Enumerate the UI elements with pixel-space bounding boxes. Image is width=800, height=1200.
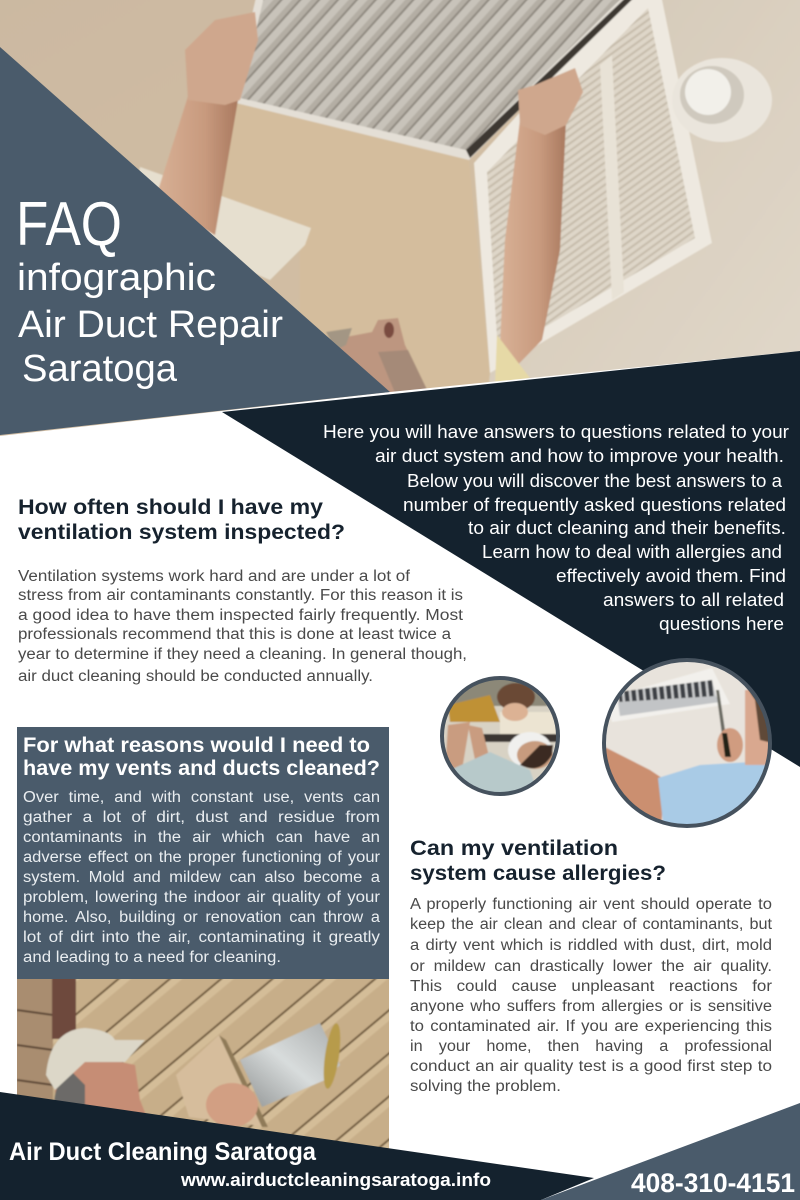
text block: allergies answer: This could cause unpleasant reactions for [410,978,772,995]
text block: inspection answer: year to determine if they need a cleaning. In general though, [18,646,467,663]
intro text block: to air duct cleaning and their benefits. [468,518,786,538]
text block: allergies answer: A properly functioning air vent should operate to [410,896,772,913]
footer band: company [0,1092,594,1200]
text block: allergies answer: keep the air clean and clear of contaminants, but [410,916,773,933]
text block: reasons answer: problem, lowering the indoor air quality of your [23,889,380,906]
icon photo: technician servicing ceiling vent [602,658,772,828]
heading: inspection question [18,496,345,544]
heading: inspection question: How often should I have my [18,496,323,519]
intro banner background [222,351,800,767]
text block: inspection answer [18,568,467,685]
hero photo: technician replacing ceiling air filter [0,0,800,460]
text block: reasons answer: gather a lot of dirt, dust and residue from [23,809,380,826]
text block: reasons answer: adverse effect on the proper functioning of your [23,849,380,866]
text block: reasons answer: lot of dirt into the air, contaminating it greatly [23,929,380,946]
company name: Air Duct Cleaning Saratoga [9,1138,317,1166]
photo: man inspecting exterior wall vent [17,979,389,1148]
panel: reasons for cleaning [17,727,389,979]
text block: reasons answer [23,789,380,966]
intro text block: number of frequently asked questions related [403,495,786,515]
text block: reasons answer: home. Also, building or renovation can throw a [23,909,380,926]
intro text block: Here you will have answers to questions related to your [323,422,789,442]
text block: allergies answer: conduct an air quality test is a good first step to [410,1058,772,1075]
text block: reasons answer: and leading to a need for cleaning. [23,949,281,966]
phone number: 408-310-4151 [631,1168,795,1198]
text block: reasons answer: Over time, and with constant use, vents can [23,789,380,806]
title: Saratoga: Saratoga [22,348,178,390]
heading: inspection question: ventilation system inspected? [18,521,345,544]
text block: inspection answer: air duct cleaning should be conducted annually. [18,668,373,685]
website: www.airductcleaningsaratoga.info [180,1170,491,1190]
text block: inspection answer: Ventilation systems work hard and are under a lot of [18,568,411,585]
text block: inspection answer: professionals recommend that this is done at least twice a [18,626,451,643]
heading: reasons question: have my vents and ducts cleaned? [23,757,380,780]
title panel [0,47,390,435]
intro text block: Below you will discover the best answers to a [407,471,783,491]
intro text block: Learn how to deal with allergies and [482,542,782,562]
text block: reasons answer: system. Mold and mildew can also become a [23,869,380,886]
intro text block: air duct system and how to improve your health. [375,446,784,466]
title: Air Duct Repair: Air Duct Repair [18,304,283,346]
text block: reasons answer: contaminants in the air which can have an [23,829,380,846]
text block: inspection answer: a good idea to have them inspected fairly frequently. Most [18,607,464,624]
text block: allergies answer: solving the problem. [410,1078,561,1095]
text block: allergies answer: anyone who suffers from allergies or is sensitive [410,998,772,1015]
title: infographic: infographic [17,257,216,299]
heading: allergies question [410,837,666,885]
title: FAQ: FAQ [16,190,122,259]
text block: allergies answer: a dirty vent which is riddled with dust, dirt, mold [410,937,772,954]
heading: reasons question: For what reasons would I need to [23,734,370,757]
heading: reasons question [23,734,380,780]
text block: allergies answer [410,896,773,1095]
intro text block: effectively avoid them. Find [556,566,786,586]
heading: allergies question: Can my ventilation [410,837,618,860]
intro text block: questions here [659,614,784,634]
text block: allergies answer: to contaminated air. If you are experiencing this [410,1018,772,1035]
footer band: phone [541,1103,800,1200]
text block: allergies answer: or mildew can drastically lower the air quality. [410,958,772,975]
intro text block [323,422,789,634]
text block: inspection answer: stress from air contaminants constantly. For this reason it is [18,587,463,604]
heading: allergies question: system cause allergies? [410,862,666,885]
icon photo: father lifting child [440,676,560,796]
text block: allergies answer: in your home, then having a professional [410,1038,772,1055]
intro text block: answers to all related [603,590,784,610]
